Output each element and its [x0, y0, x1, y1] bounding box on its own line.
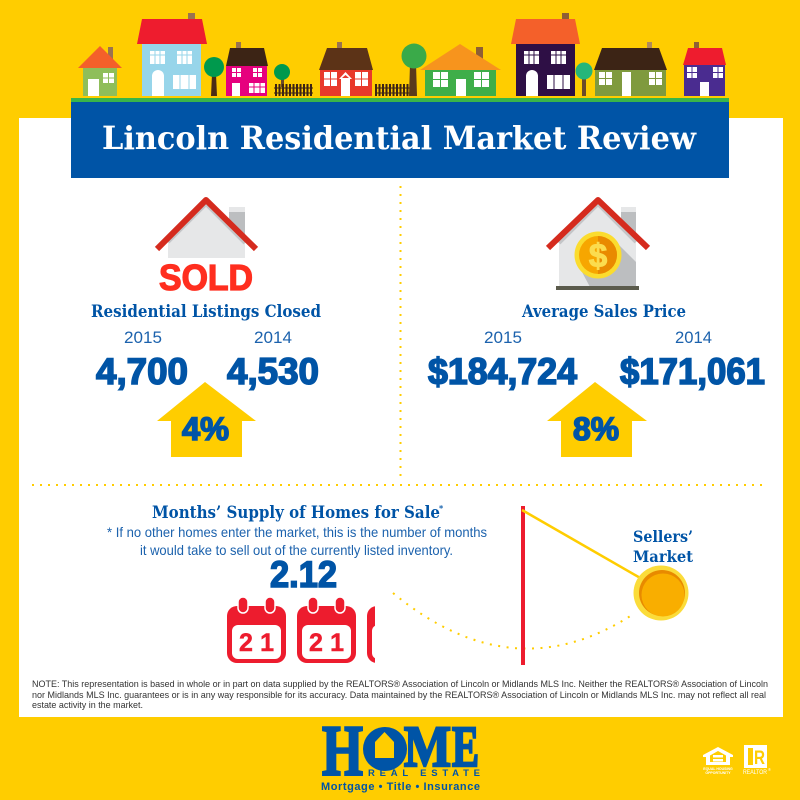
house: green with orange roof [420, 44, 501, 96]
icon: realtor mark: R [754, 748, 765, 769]
icon: sold house [157, 200, 256, 258]
arrow: up 8% [547, 382, 647, 457]
icon: equal housing opportunity: EQUAL HOUSING [703, 767, 733, 771]
heading: Months’ Supply of Homes for Sale [152, 503, 440, 523]
footnote marker: * [439, 503, 444, 513]
pole [521, 506, 525, 665]
house: blue with red roof [137, 13, 207, 96]
panel: months' supply [107, 503, 487, 663]
illustration: row of houses [78, 13, 726, 96]
house: dark purple with orange roof [511, 13, 580, 96]
value 2015: $184,724 [428, 351, 577, 392]
icon: calendar 2: 21 [309, 629, 344, 657]
icon: equal housing opportunity: OPPORTUNITY [705, 771, 731, 775]
icon: house with dollar coin [548, 200, 648, 290]
panel: residential listings closed [91, 200, 321, 457]
sellers' market label: Market [633, 547, 694, 566]
title banner: Lincoln Residential Market Review [102, 119, 697, 157]
icon: calendar 1: 21 [239, 629, 274, 657]
house: purple with red roof [683, 42, 726, 96]
fence [375, 84, 410, 96]
logo: Home Real Estate: Mortgage • Title • Insurance [321, 781, 480, 793]
arrow: up 4%: 4% [182, 411, 229, 447]
value 2015: 4,700 [96, 351, 188, 392]
logo: Home Real Estate [321, 711, 480, 793]
explanation: it would take to sell out of the currently listed inventory. [140, 542, 453, 558]
heading: Residential Listings Closed [91, 302, 321, 322]
logo: Home Real Estate: E [452, 714, 479, 779]
logo: Home Real Estate: H [322, 711, 363, 791]
disclaimer note [32, 679, 768, 711]
tree and fence [274, 64, 313, 96]
arrow: up 4% [157, 382, 256, 457]
house: green with orange roof [78, 46, 122, 96]
panel: average sales price [428, 200, 765, 457]
tree [204, 57, 224, 96]
label 2014: 2014 [254, 328, 292, 347]
label 2015: 2015 [124, 328, 162, 347]
sellers' market label: Sellers’ [633, 527, 693, 546]
pendulum weight [634, 566, 688, 620]
logo: Home Real Estate: M [404, 714, 451, 779]
title banner [71, 102, 729, 178]
icon: calendar 1 [227, 597, 286, 663]
icon: partial calendar [367, 606, 375, 663]
chart: market pendulum [393, 506, 694, 665]
value 2014: 4,530 [227, 351, 319, 392]
heading: Average Sales Price [521, 302, 686, 322]
house: olive with brown roof [594, 42, 667, 96]
disclaimer note: NOTE: This representation is based in whole or in part on data supplied by the REALTORS® Association of Lincoln or Midlands MLS Inc. Neither the REALTORS® Association of Lincoln [32, 679, 768, 690]
disclaimer note: nor Midlands MLS Inc. guarantees or is in any way responsible for its accuracy. Data maintained by the REALTORS® Association of Lincoln or Midlands MLS Inc. may not reflect all real [32, 690, 766, 701]
value 2014: $171,061 [620, 351, 765, 392]
white content panel [19, 118, 783, 717]
label 2014: 2014 [675, 328, 712, 347]
logo: Home Real Estate: REAL ESTATE [368, 768, 480, 779]
icon: realtor mark [743, 745, 771, 776]
house: red with brown roof [319, 42, 373, 96]
green ground strip [71, 98, 729, 102]
tree [576, 62, 592, 96]
sold label: SOLD [159, 257, 253, 298]
explanation [107, 524, 487, 558]
icon: calendar 2 [297, 597, 356, 663]
house: pink with brown roof [226, 42, 268, 96]
dotted swing arc [393, 593, 635, 649]
icon: equal housing opportunity [703, 747, 733, 775]
icon: realtor mark: REALTOR [743, 770, 768, 776]
explanation: * If no other homes enter the market, this is the number of months [107, 524, 487, 540]
icon: house with dollar coin: $ [589, 237, 607, 274]
tree [402, 44, 426, 96]
pendulum string [522, 510, 642, 579]
label 2015: 2015 [484, 328, 522, 347]
icon: realtor mark: ® [768, 767, 771, 772]
arrow: up 8%: 8% [573, 411, 619, 447]
value: 2.12 [270, 554, 337, 595]
disclaimer note: estate activity in the market. [32, 700, 143, 711]
sellers' market label [633, 527, 694, 566]
